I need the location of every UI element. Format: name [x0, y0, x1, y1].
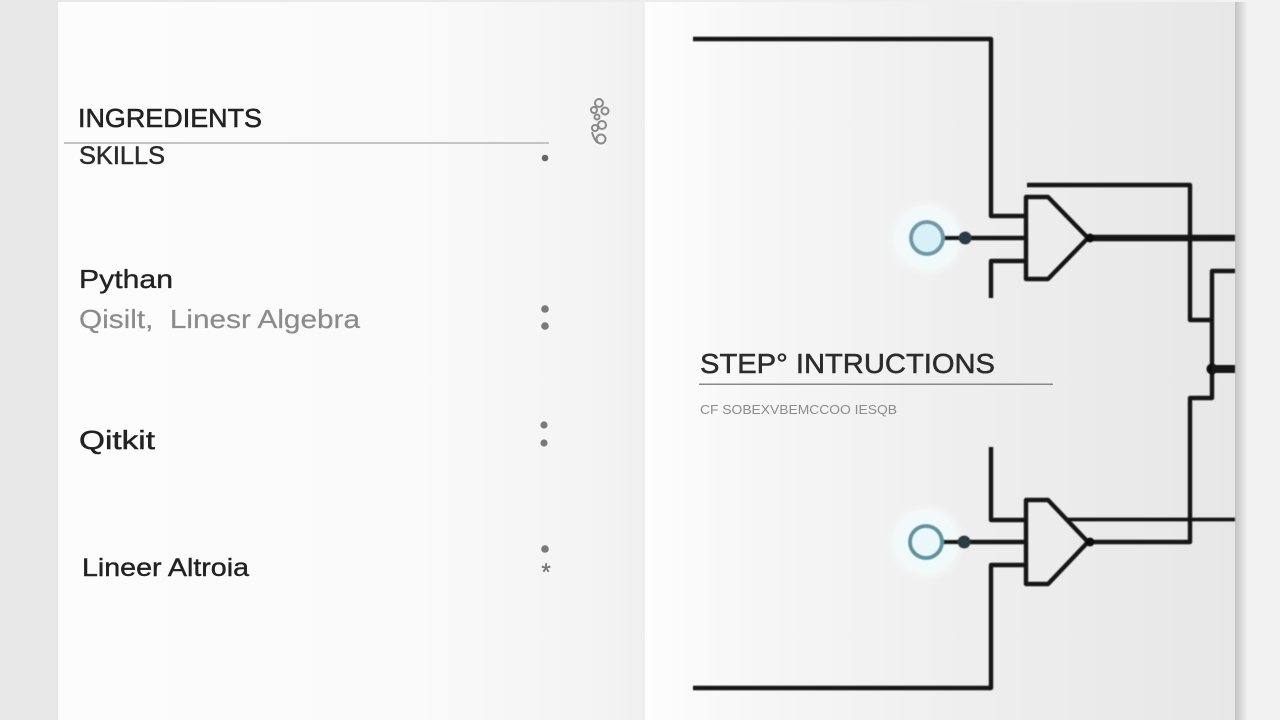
right page edge shadow [1235, 2, 1247, 720]
subheading: skills: SKILLS [79, 142, 165, 170]
wire: right bus [1088, 271, 1235, 542]
gate: upper [1026, 197, 1088, 279]
upper input glow [887, 198, 967, 278]
gate: lower [1026, 500, 1088, 584]
panel: step instructions [645, 2, 1235, 720]
heading: ingredients: INGREDIENTS [78, 103, 262, 133]
panel background: ingredients [58, 2, 645, 720]
list item: python: Pythan [79, 264, 173, 294]
divider: ingredients rule [64, 142, 549, 144]
wire: upper gate output [1088, 235, 1235, 241]
list item description: Qisilt, Linesr Algebra [79, 304, 361, 334]
qubit ring: lower [910, 526, 942, 558]
icon: decorative molecule [591, 99, 608, 144]
instructions caption: CF SOBEXVBEMCCOO IESQB [700, 402, 897, 417]
circuit diagram [693, 39, 1235, 688]
heading: step instructions: STEP° INTRUCTIONS [700, 348, 995, 379]
upper input wire and node [943, 232, 1026, 244]
panel background: instructions [645, 2, 1235, 720]
lower input glow [886, 502, 966, 582]
gate tip node: lower [1086, 538, 1094, 546]
panel: ingredients [58, 2, 645, 720]
lower input wire and node [942, 536, 1026, 548]
wire: upper feedback loop [1027, 185, 1212, 320]
bullet markers [540, 155, 551, 586]
wire: lower gate through line [1068, 518, 1235, 521]
wire: bus output with node [1206, 364, 1235, 374]
list item: linear algebra: Lineer Altroia [82, 554, 249, 582]
list item: qiskit: Qitkit [79, 425, 156, 455]
bullet markers: * [541, 559, 551, 586]
qubit ring: upper [911, 222, 943, 254]
wire: upper gate lower stub [991, 261, 1026, 298]
wire: lower gate top feed [991, 447, 1026, 520]
wire: top feed into upper gate [693, 39, 1026, 216]
wire: bottom feed from lower gate [693, 565, 1026, 688]
divider: instructions rule [699, 384, 1053, 385]
gate tip node: upper [1086, 234, 1094, 242]
